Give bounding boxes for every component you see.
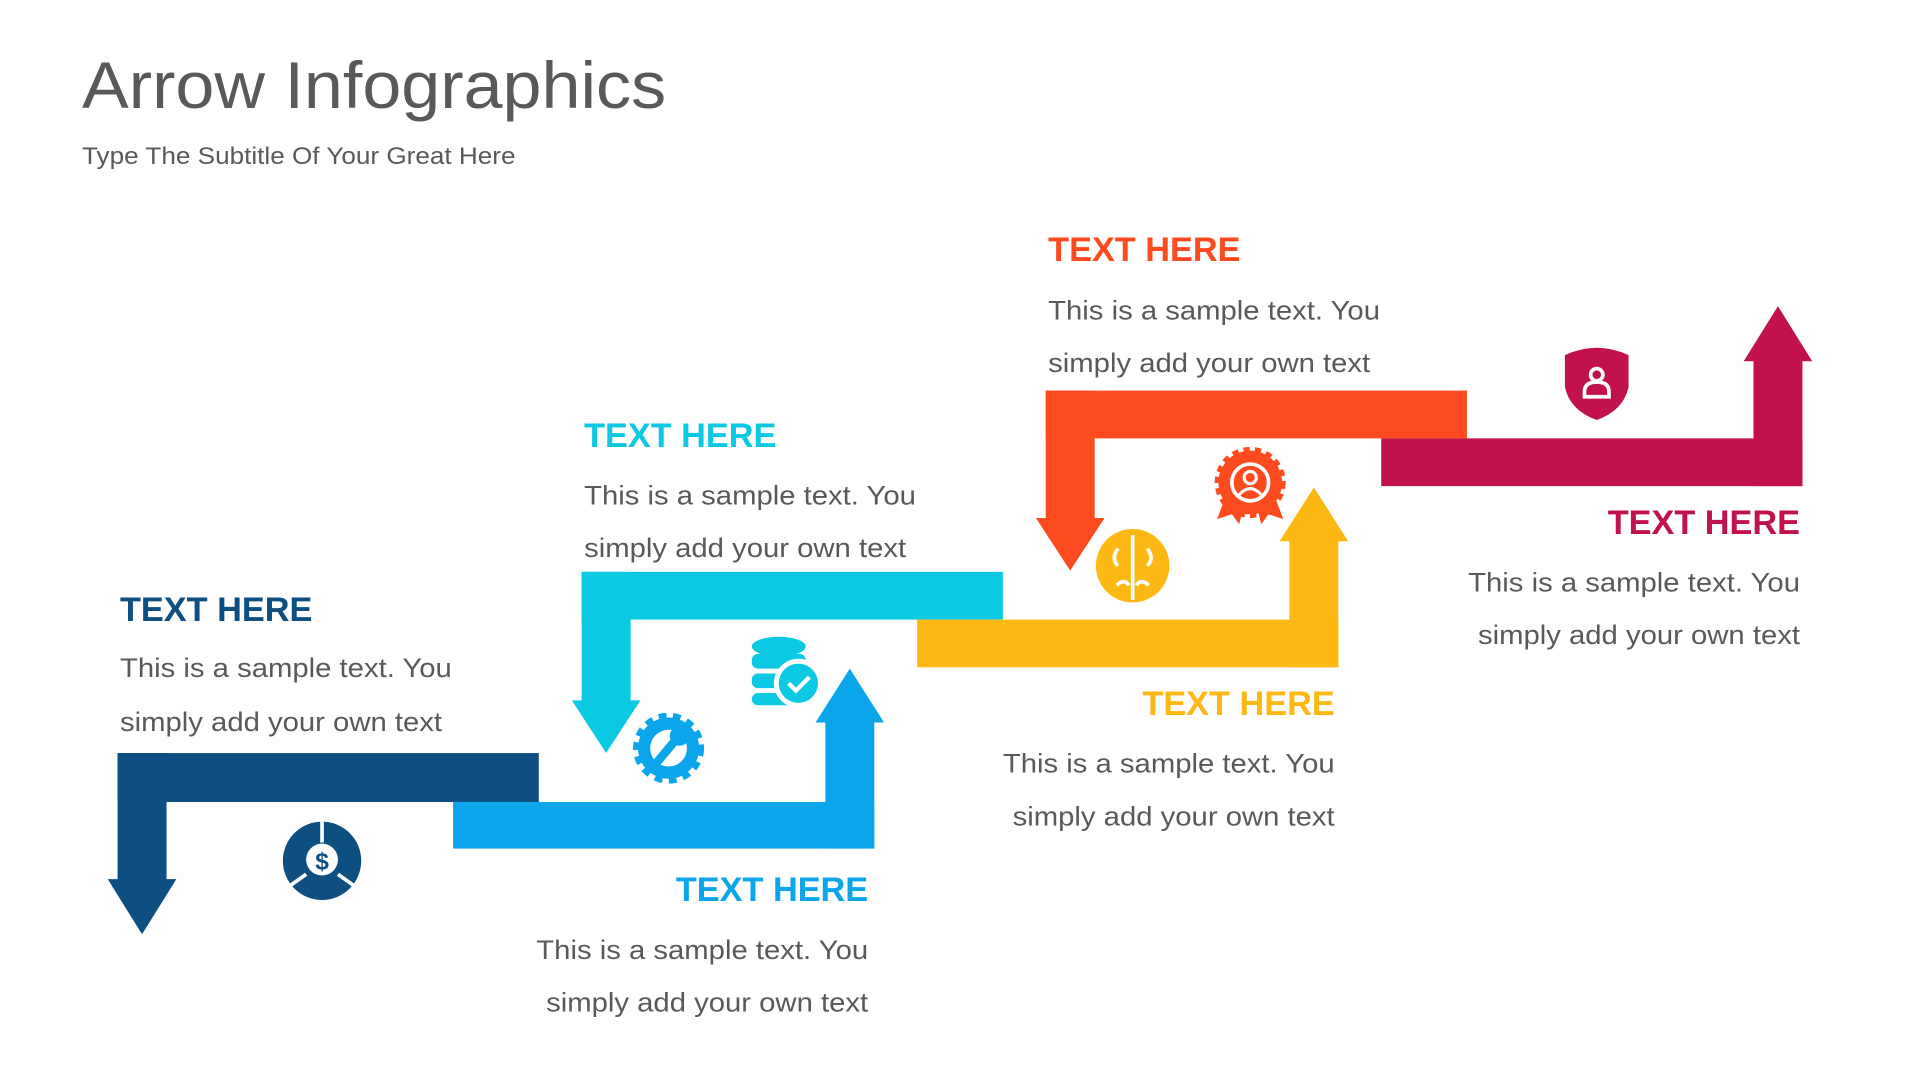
arrow: cyan bbox=[572, 572, 1003, 753]
text block 3: This is a sample text. You bbox=[584, 480, 916, 510]
text block 4: TEXT HERE bbox=[1142, 685, 1335, 723]
text block 2 bbox=[536, 871, 869, 1017]
text block 2: simply add your own text bbox=[546, 987, 869, 1017]
icon: wrench gear bbox=[638, 718, 699, 779]
text block 1: This is a sample text. You bbox=[120, 653, 452, 683]
text block 6: TEXT HERE bbox=[1608, 504, 1800, 542]
text block 1: simply add your own text bbox=[120, 707, 443, 737]
arrow: crimson bbox=[1381, 306, 1812, 486]
icon: dollar circle: $ bbox=[315, 848, 329, 875]
text block 6: simply add your own text bbox=[1478, 620, 1801, 650]
subtitle: Type The Subtitle Of Your Great Here bbox=[82, 143, 516, 170]
text block 6 bbox=[1468, 504, 1801, 650]
text block 4: This is a sample text. You bbox=[1003, 749, 1335, 779]
text block 5: This is a sample text. You bbox=[1048, 296, 1380, 326]
icon: shield user bbox=[1565, 348, 1629, 420]
text block 1: TEXT HERE bbox=[120, 591, 312, 629]
arrow: dark blue bbox=[108, 753, 539, 934]
title: Arrow Infographics bbox=[82, 49, 666, 123]
icon: database check bbox=[752, 637, 823, 708]
text block 3: simply add your own text bbox=[584, 533, 907, 563]
icon: dollar circle bbox=[283, 822, 361, 900]
text block 5: simply add your own text bbox=[1048, 348, 1371, 378]
text block 1 bbox=[120, 591, 452, 737]
icon: brain bbox=[1096, 529, 1169, 602]
text block 3 bbox=[584, 417, 916, 563]
text block 6: This is a sample text. You bbox=[1468, 567, 1800, 597]
arrow: orange bbox=[1036, 391, 1467, 571]
text block 5 bbox=[1048, 231, 1380, 378]
arrow: light blue bbox=[453, 669, 884, 849]
text block 5: TEXT HERE bbox=[1048, 231, 1240, 269]
text block 3: TEXT HERE bbox=[584, 417, 776, 455]
text block 4: simply add your own text bbox=[1013, 801, 1335, 831]
arrow: yellow bbox=[917, 487, 1348, 667]
icon: award badge bbox=[1217, 451, 1283, 524]
text block 2: TEXT HERE bbox=[676, 871, 868, 909]
text block 4 bbox=[1003, 685, 1335, 831]
text block 2: This is a sample text. You bbox=[536, 935, 868, 965]
